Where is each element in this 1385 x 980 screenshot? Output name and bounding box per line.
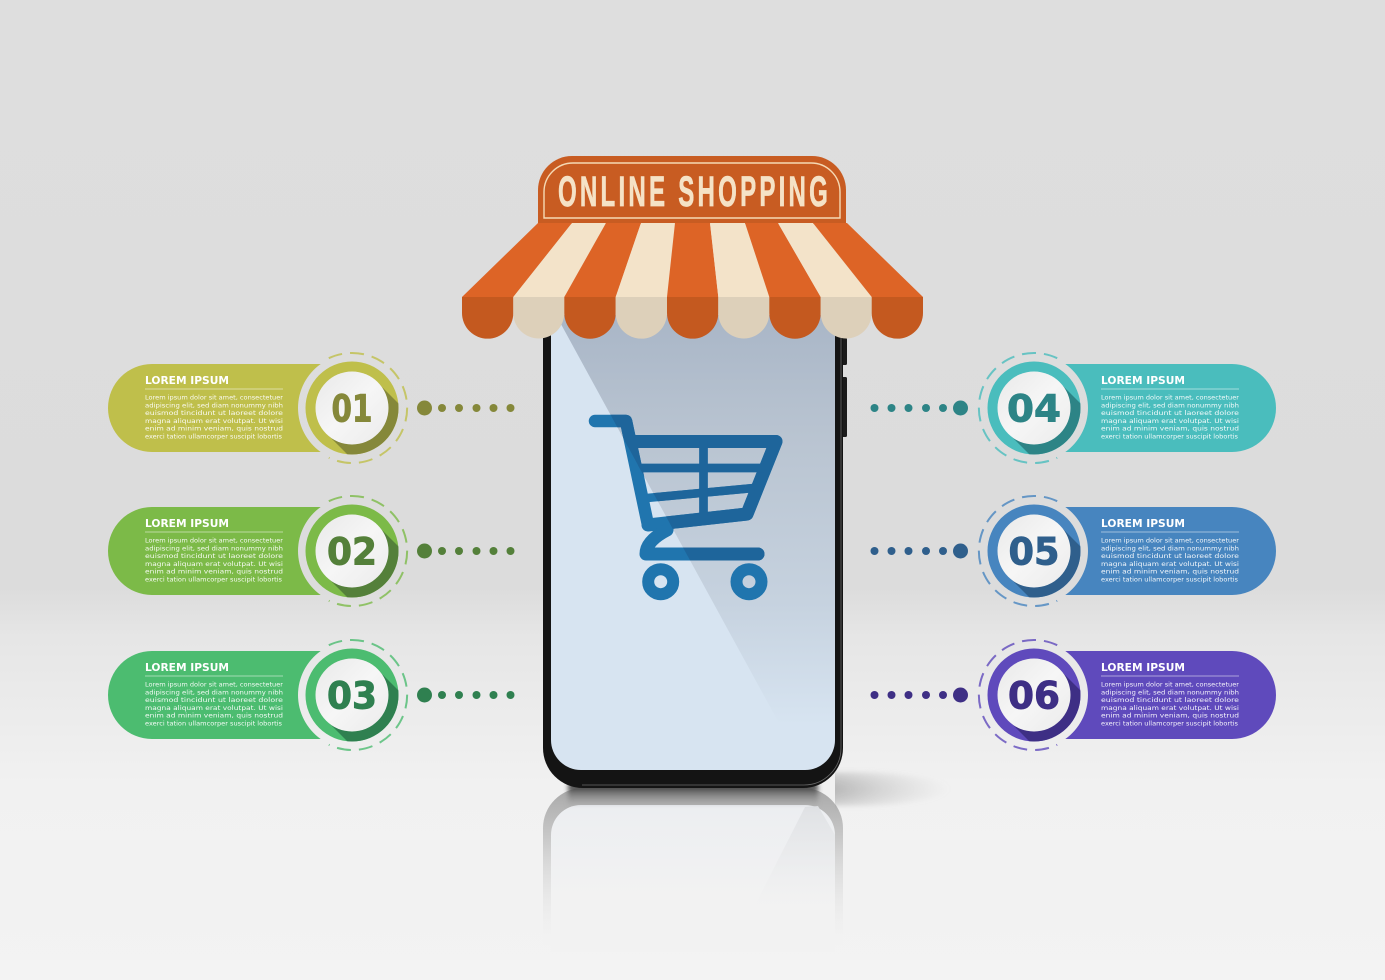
text block 01: exerci tation ullamcorper suscipit lobortis xyxy=(145,434,282,440)
number badge 02: 02 xyxy=(327,530,377,574)
text block 01: Lorem ipsum dolor sit amet, consectetuer xyxy=(145,394,283,402)
number badge 04 xyxy=(978,352,1080,464)
text block 01: euismod tincidunt ut laoreet dolore xyxy=(145,410,283,417)
text block 05: magna aliquam erat volutpat. Ut wisi xyxy=(1101,561,1239,568)
text block 01: adipiscing elit, sed diam nonummy nibh xyxy=(145,402,283,409)
pill 03 xyxy=(108,651,321,739)
number badge 02 xyxy=(306,495,408,607)
dotted connector 01 xyxy=(417,400,514,416)
dotted connector 05 xyxy=(870,544,968,558)
text block 03: adipiscing elit, sed diam nonummy nibh xyxy=(145,689,283,696)
text block 05: Lorem ipsum dolor sit amet, consectetuer xyxy=(1101,538,1239,544)
heading 04: LOREM IPSUM xyxy=(1101,375,1185,387)
text block 04: enim ad minim veniam, quis nostrud xyxy=(1101,426,1239,433)
text block 06: magna aliquam erat volutpat. Ut wisi xyxy=(1101,705,1239,712)
pill 01 xyxy=(108,364,321,452)
text block 02: enim ad minim veniam, quis nostrud xyxy=(145,569,283,576)
heading 02: LOREM IPSUM xyxy=(145,518,229,530)
text block 02 xyxy=(145,538,283,584)
text block 06: euismod tincidunt ut laoreet dolore xyxy=(1101,697,1239,704)
text block 01 xyxy=(145,394,283,440)
text block 04: adipiscing elit, sed diam nonummy nibh xyxy=(1101,402,1239,409)
heading 01: LOREM IPSUM xyxy=(145,375,229,387)
cart darker area under shade xyxy=(595,421,776,554)
text block 03: magna aliquam erat volutpat. Ut wisi xyxy=(145,705,283,712)
awning shadow on screen xyxy=(556,315,835,725)
phone reflection xyxy=(543,784,843,952)
number badge 01 xyxy=(306,352,408,464)
text block 05: adipiscing elit, sed diam nonummy nibh xyxy=(1101,545,1239,552)
panel: step 04 xyxy=(870,352,1276,464)
panel: step 03 xyxy=(108,639,514,751)
dotted connector 06 xyxy=(870,688,968,702)
text block 06 xyxy=(1101,682,1239,728)
text block 02: exerci tation ullamcorper suscipit lobortis xyxy=(145,576,282,584)
text block 06: exerci tation ullamcorper suscipit lobortis xyxy=(1101,720,1238,728)
text block 03: euismod tincidunt ut laoreet dolore xyxy=(145,697,283,704)
number badge 03 xyxy=(306,639,408,751)
panel: step 05 xyxy=(870,495,1276,607)
text block 06: Lorem ipsum dolor sit amet, consectetuer xyxy=(1101,682,1239,688)
text block 03: enim ad minim veniam, quis nostrud xyxy=(145,713,283,720)
panel: step 02 xyxy=(108,495,514,607)
number badge 06: 06 xyxy=(1008,674,1060,718)
heading 05: LOREM IPSUM xyxy=(1101,518,1185,530)
dotted connector 02 xyxy=(417,544,514,558)
phone side buttons xyxy=(841,338,847,437)
text block 03: Lorem ipsum dolor sit amet, consectetuer xyxy=(145,682,283,688)
text block 04: euismod tincidunt ut laoreet dolore xyxy=(1101,410,1239,417)
text block 02: magna aliquam erat volutpat. Ut wisi xyxy=(145,561,283,568)
text block 01: enim ad minim veniam, quis nostrud xyxy=(145,426,283,433)
dotted connector 04 xyxy=(870,400,968,416)
awning xyxy=(462,223,923,339)
icon: shopping cart xyxy=(595,421,776,594)
text block 05: enim ad minim veniam, quis nostrud xyxy=(1101,569,1239,576)
phone body xyxy=(543,310,843,788)
text block 06: adipiscing elit, sed diam nonummy nibh xyxy=(1101,689,1239,696)
number badge 01: 01 xyxy=(332,388,372,430)
phone xyxy=(543,310,847,788)
text block 02: euismod tincidunt ut laoreet dolore xyxy=(145,553,283,560)
phone ground shadow xyxy=(835,771,924,807)
number badge 05: 05 xyxy=(1008,530,1060,574)
number badge 06 xyxy=(978,639,1080,751)
panel: step 01 xyxy=(108,352,514,464)
text block 02: Lorem ipsum dolor sit amet, consectetuer xyxy=(145,538,283,544)
text block 04 xyxy=(1101,394,1239,440)
number badge 05 xyxy=(978,495,1080,607)
pill 06 xyxy=(1065,651,1276,739)
number badge 04: 04 xyxy=(1007,388,1061,430)
phone screen xyxy=(551,310,835,770)
text block 05: euismod tincidunt ut laoreet dolore xyxy=(1101,553,1239,560)
text block 03: exerci tation ullamcorper suscipit lobortis xyxy=(145,720,282,728)
text block 02: adipiscing elit, sed diam nonummy nibh xyxy=(145,545,283,552)
heading 06: LOREM IPSUM xyxy=(1101,662,1185,674)
pill 02 xyxy=(108,507,321,595)
text block 05: exerci tation ullamcorper suscipit lobortis xyxy=(1101,576,1238,584)
heading 03: LOREM IPSUM xyxy=(145,662,229,674)
pill 05 xyxy=(1065,507,1276,595)
title: ONLINE SHOPPING xyxy=(558,168,828,216)
panel: step 06 xyxy=(870,639,1276,751)
dotted connector 03 xyxy=(417,688,514,702)
awning sign xyxy=(538,156,846,224)
text block 03 xyxy=(145,682,283,728)
text block 04: Lorem ipsum dolor sit amet, consectetuer xyxy=(1101,394,1239,402)
pill 04 xyxy=(1065,364,1276,452)
sign board xyxy=(538,156,846,224)
text block 01: magna aliquam erat volutpat. Ut wisi xyxy=(145,418,283,425)
text block 06: enim ad minim veniam, quis nostrud xyxy=(1101,713,1239,720)
text block 04: magna aliquam erat volutpat. Ut wisi xyxy=(1101,418,1239,425)
number badge 03: 03 xyxy=(327,674,377,718)
text block 04: exerci tation ullamcorper suscipit lobortis xyxy=(1101,434,1238,440)
text block 05 xyxy=(1101,538,1239,584)
